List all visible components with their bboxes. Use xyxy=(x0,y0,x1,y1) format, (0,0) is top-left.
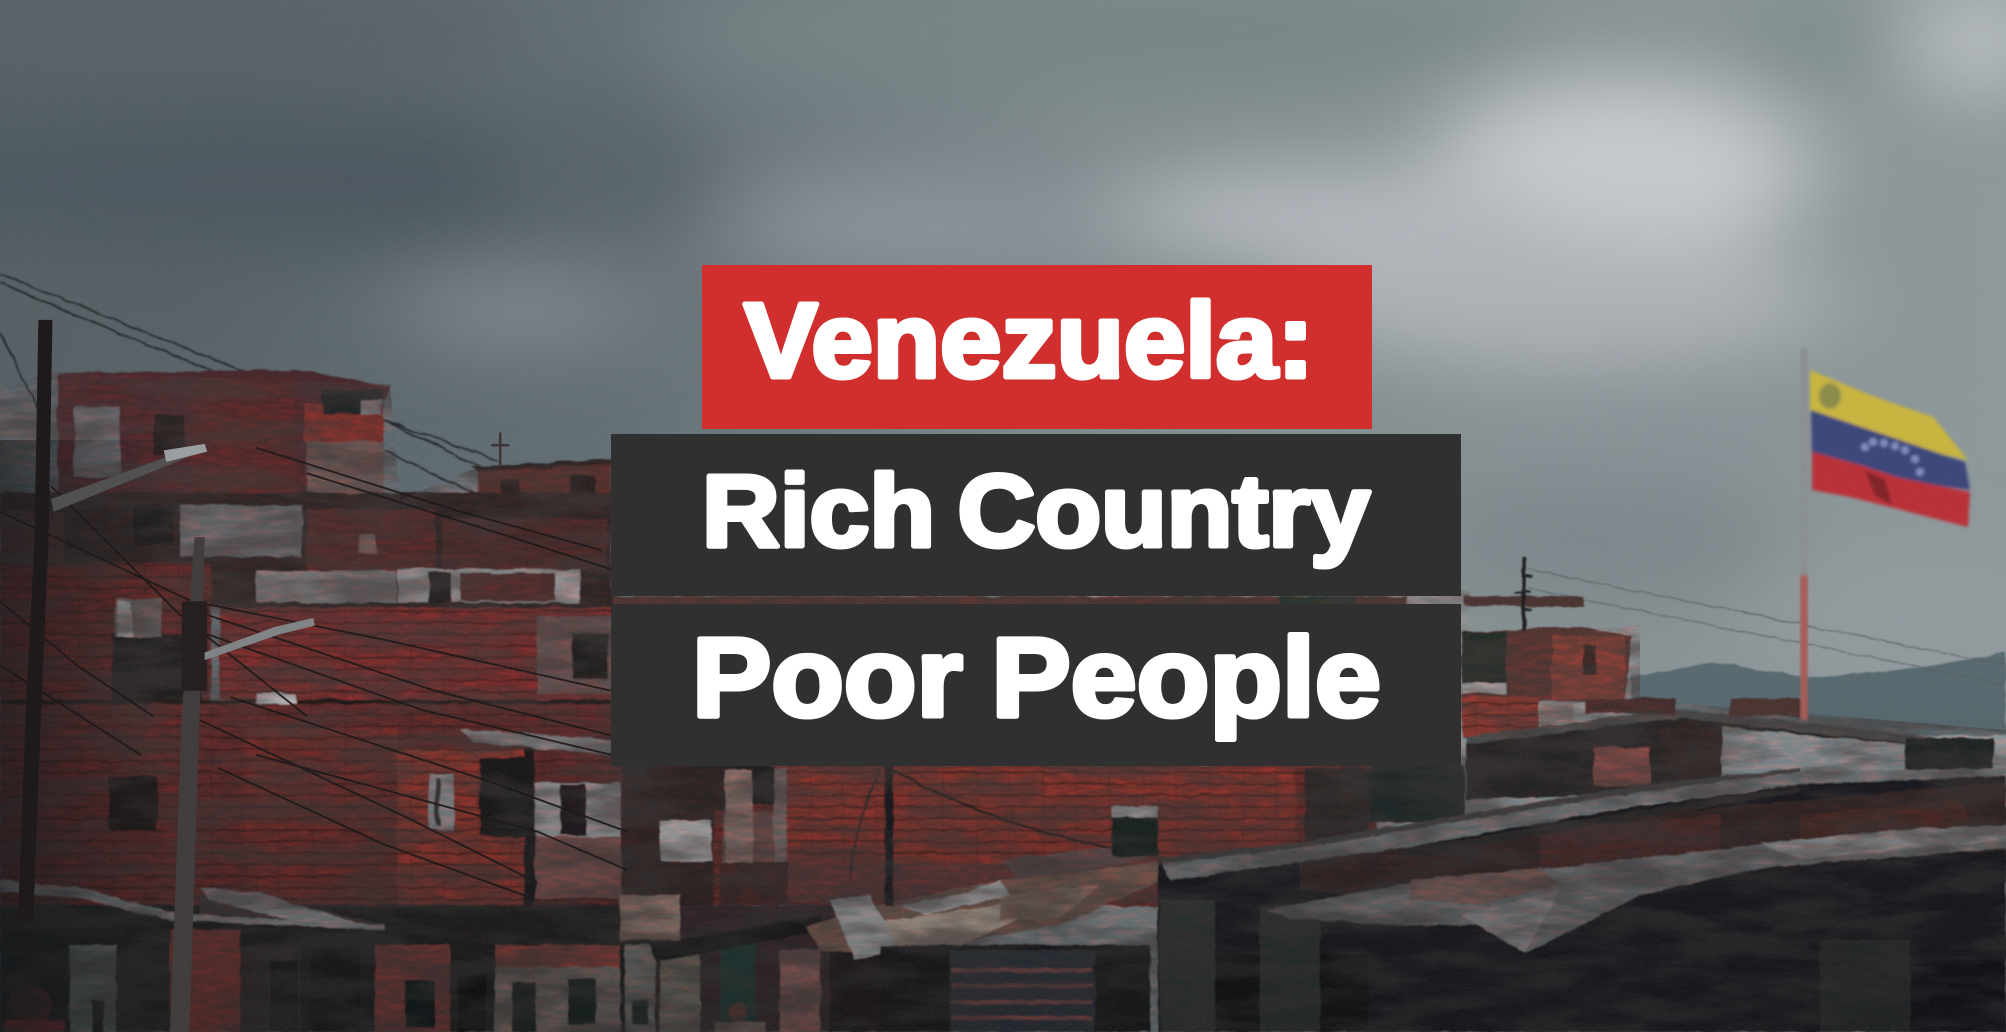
third tier red walls xyxy=(0,563,612,713)
title banner: Rich Country: Rich Country xyxy=(702,454,1370,568)
right upper building xyxy=(471,459,612,563)
big lower brick wall xyxy=(0,704,627,915)
center back brick wall xyxy=(622,765,1465,908)
title banner: Venezuela: Venezuela: xyxy=(744,282,1314,400)
title banner: Poor People xyxy=(611,604,1461,766)
Venezuelan flag xyxy=(1810,370,1970,527)
small rooftop antenna xyxy=(491,432,509,466)
brown wall beneath the upper roof xyxy=(1300,782,2006,915)
corrugated shutter xyxy=(880,945,1150,1032)
sky wires xyxy=(0,274,2006,684)
flagpole xyxy=(1800,348,1808,720)
strip of rooftops between the title bars xyxy=(612,596,1584,606)
utility pole, left xyxy=(18,320,207,921)
right hilltop brick house xyxy=(1462,556,1631,738)
title banner: Poor People: Poor People xyxy=(692,615,1381,740)
alley-side columns against the brick wall xyxy=(620,766,788,940)
left tin awnings xyxy=(0,880,660,935)
scene: foreground in true pixels xyxy=(0,766,2006,1032)
brick wall details: pole, chimney and cable xyxy=(850,766,1158,906)
rust and cream roof tangle xyxy=(805,845,1158,960)
brick texture overlays xyxy=(0,372,2006,1032)
title banner: Rich Country xyxy=(611,434,1461,596)
dark right-hand shack xyxy=(1158,770,2006,1032)
distant mountains xyxy=(1631,652,2006,736)
utility pole, center-left xyxy=(170,537,315,1032)
title banner: Venezuela xyxy=(702,265,1372,429)
scene: hillside shanty town, background tiers xyxy=(0,274,2006,915)
middle band of dwellings xyxy=(0,493,612,608)
scene: left poles, lamps and cables xyxy=(0,320,627,1032)
low sheds below the flag xyxy=(1466,698,1996,800)
corrugated tin roof, lower xyxy=(1265,825,2006,953)
corrugated tin roof, upper xyxy=(1160,768,2006,880)
narrow alley, people and shop fronts xyxy=(650,905,885,1032)
street cables xyxy=(0,448,627,896)
lower storefront row xyxy=(0,905,660,1032)
top brick building xyxy=(0,370,390,512)
